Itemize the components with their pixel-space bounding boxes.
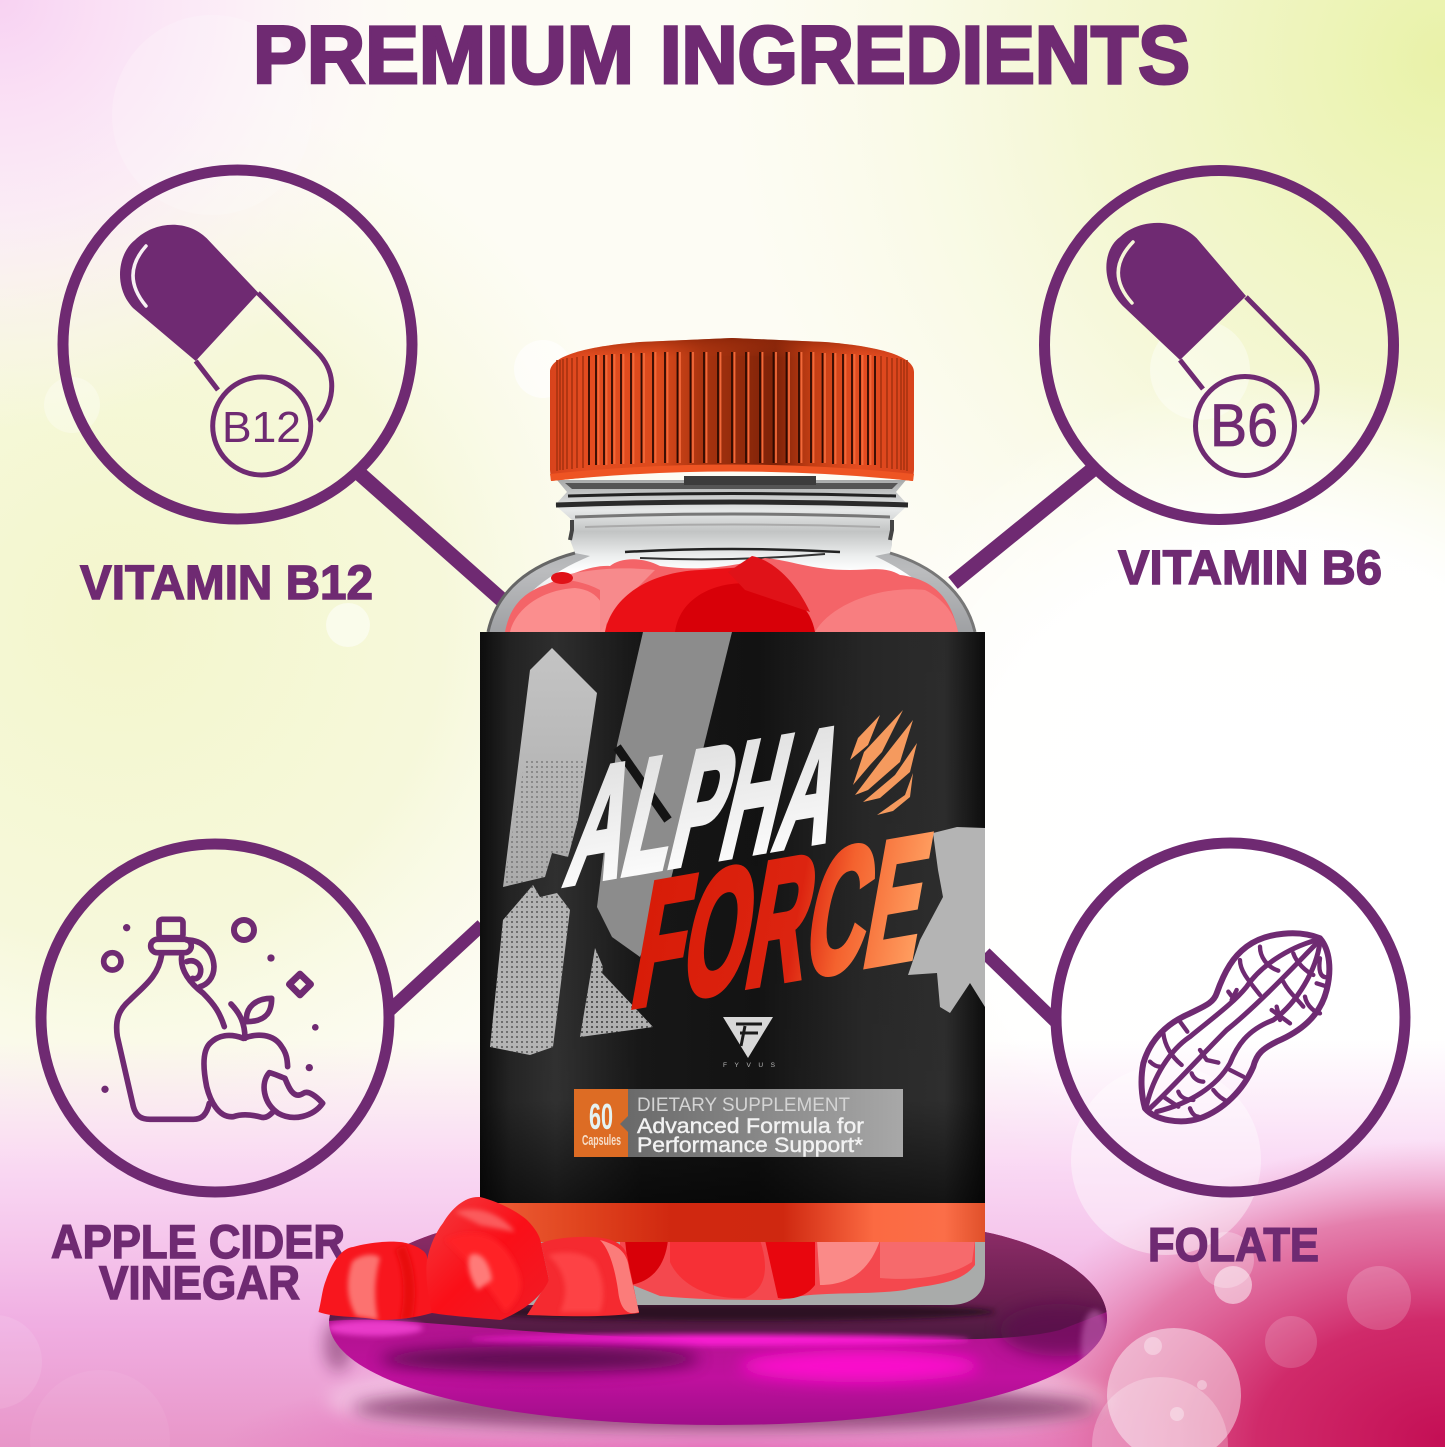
bottle cap: [550, 338, 914, 481]
supplement badge: Capsules: [582, 1132, 621, 1149]
loose gummies: [318, 1197, 639, 1320]
title: [253, 10, 1190, 101]
brand word alpha: ALPHA: [554, 689, 862, 920]
brand logo: FYVUS: [723, 1062, 776, 1069]
icon: peanut: [1142, 933, 1329, 1121]
icon: b6 capsule: B6: [1210, 392, 1278, 459]
gummy center: [426, 1197, 549, 1320]
title: INGREDIENTS: [660, 10, 1190, 101]
icon: bottle and apple: [101, 919, 323, 1119]
brand logo: [723, 1017, 776, 1069]
brand word force: FORCE: [621, 797, 943, 1046]
label diagonal stripe: [617, 747, 668, 820]
icon: b6 capsule: [1106, 223, 1317, 476]
icon: claw mark: [850, 710, 917, 815]
icon: b12 capsule: [120, 225, 332, 475]
orange band: [480, 1203, 985, 1242]
label figure left upper: [503, 648, 597, 887]
panel: vitamin b12: [63, 170, 412, 519]
title: PREMIUM: [253, 10, 634, 101]
label: apple cider vinegar: APPLE CIDER: [51, 1215, 345, 1268]
bottle label background: [480, 632, 985, 1204]
supplement badge: DIETARY SUPPLEMENT: [637, 1095, 850, 1116]
label: vitamin b12: VITAMIN B12: [80, 557, 373, 610]
label: vitamin b6: VITAMIN B6: [1118, 542, 1382, 595]
label right gray shape: [908, 827, 985, 1013]
supplement badge: Performance Support*: [637, 1134, 863, 1157]
label: folate: FOLATE: [1148, 1218, 1319, 1271]
label figure left lower: [490, 885, 570, 1055]
label gray band: [597, 632, 732, 957]
supplement badge: 60: [589, 1096, 613, 1137]
gummy right: [527, 1237, 639, 1316]
connector lines: [360, 470, 1092, 1022]
platform: [320, 1225, 1120, 1446]
panel: vitamin b6: [1044, 170, 1394, 520]
bottle: [480, 338, 985, 1305]
supplement badge: [574, 1089, 903, 1157]
icon: b12 capsule: B12: [222, 403, 301, 452]
gummy left: [318, 1242, 432, 1320]
glass base with gummies: [480, 1240, 985, 1305]
label: apple cider vinegar: VINEGAR: [99, 1256, 300, 1309]
gummies inside jar top: [505, 556, 958, 632]
bottle glass neck and shoulder: [488, 476, 975, 632]
label: apple cider vinegar: [51, 1215, 345, 1309]
label triangle figure: [580, 948, 653, 1037]
panel: folate: [1056, 843, 1405, 1192]
supplement badge: Advanced Formula for: [637, 1115, 864, 1138]
panel: apple cider vinegar: [41, 844, 389, 1192]
